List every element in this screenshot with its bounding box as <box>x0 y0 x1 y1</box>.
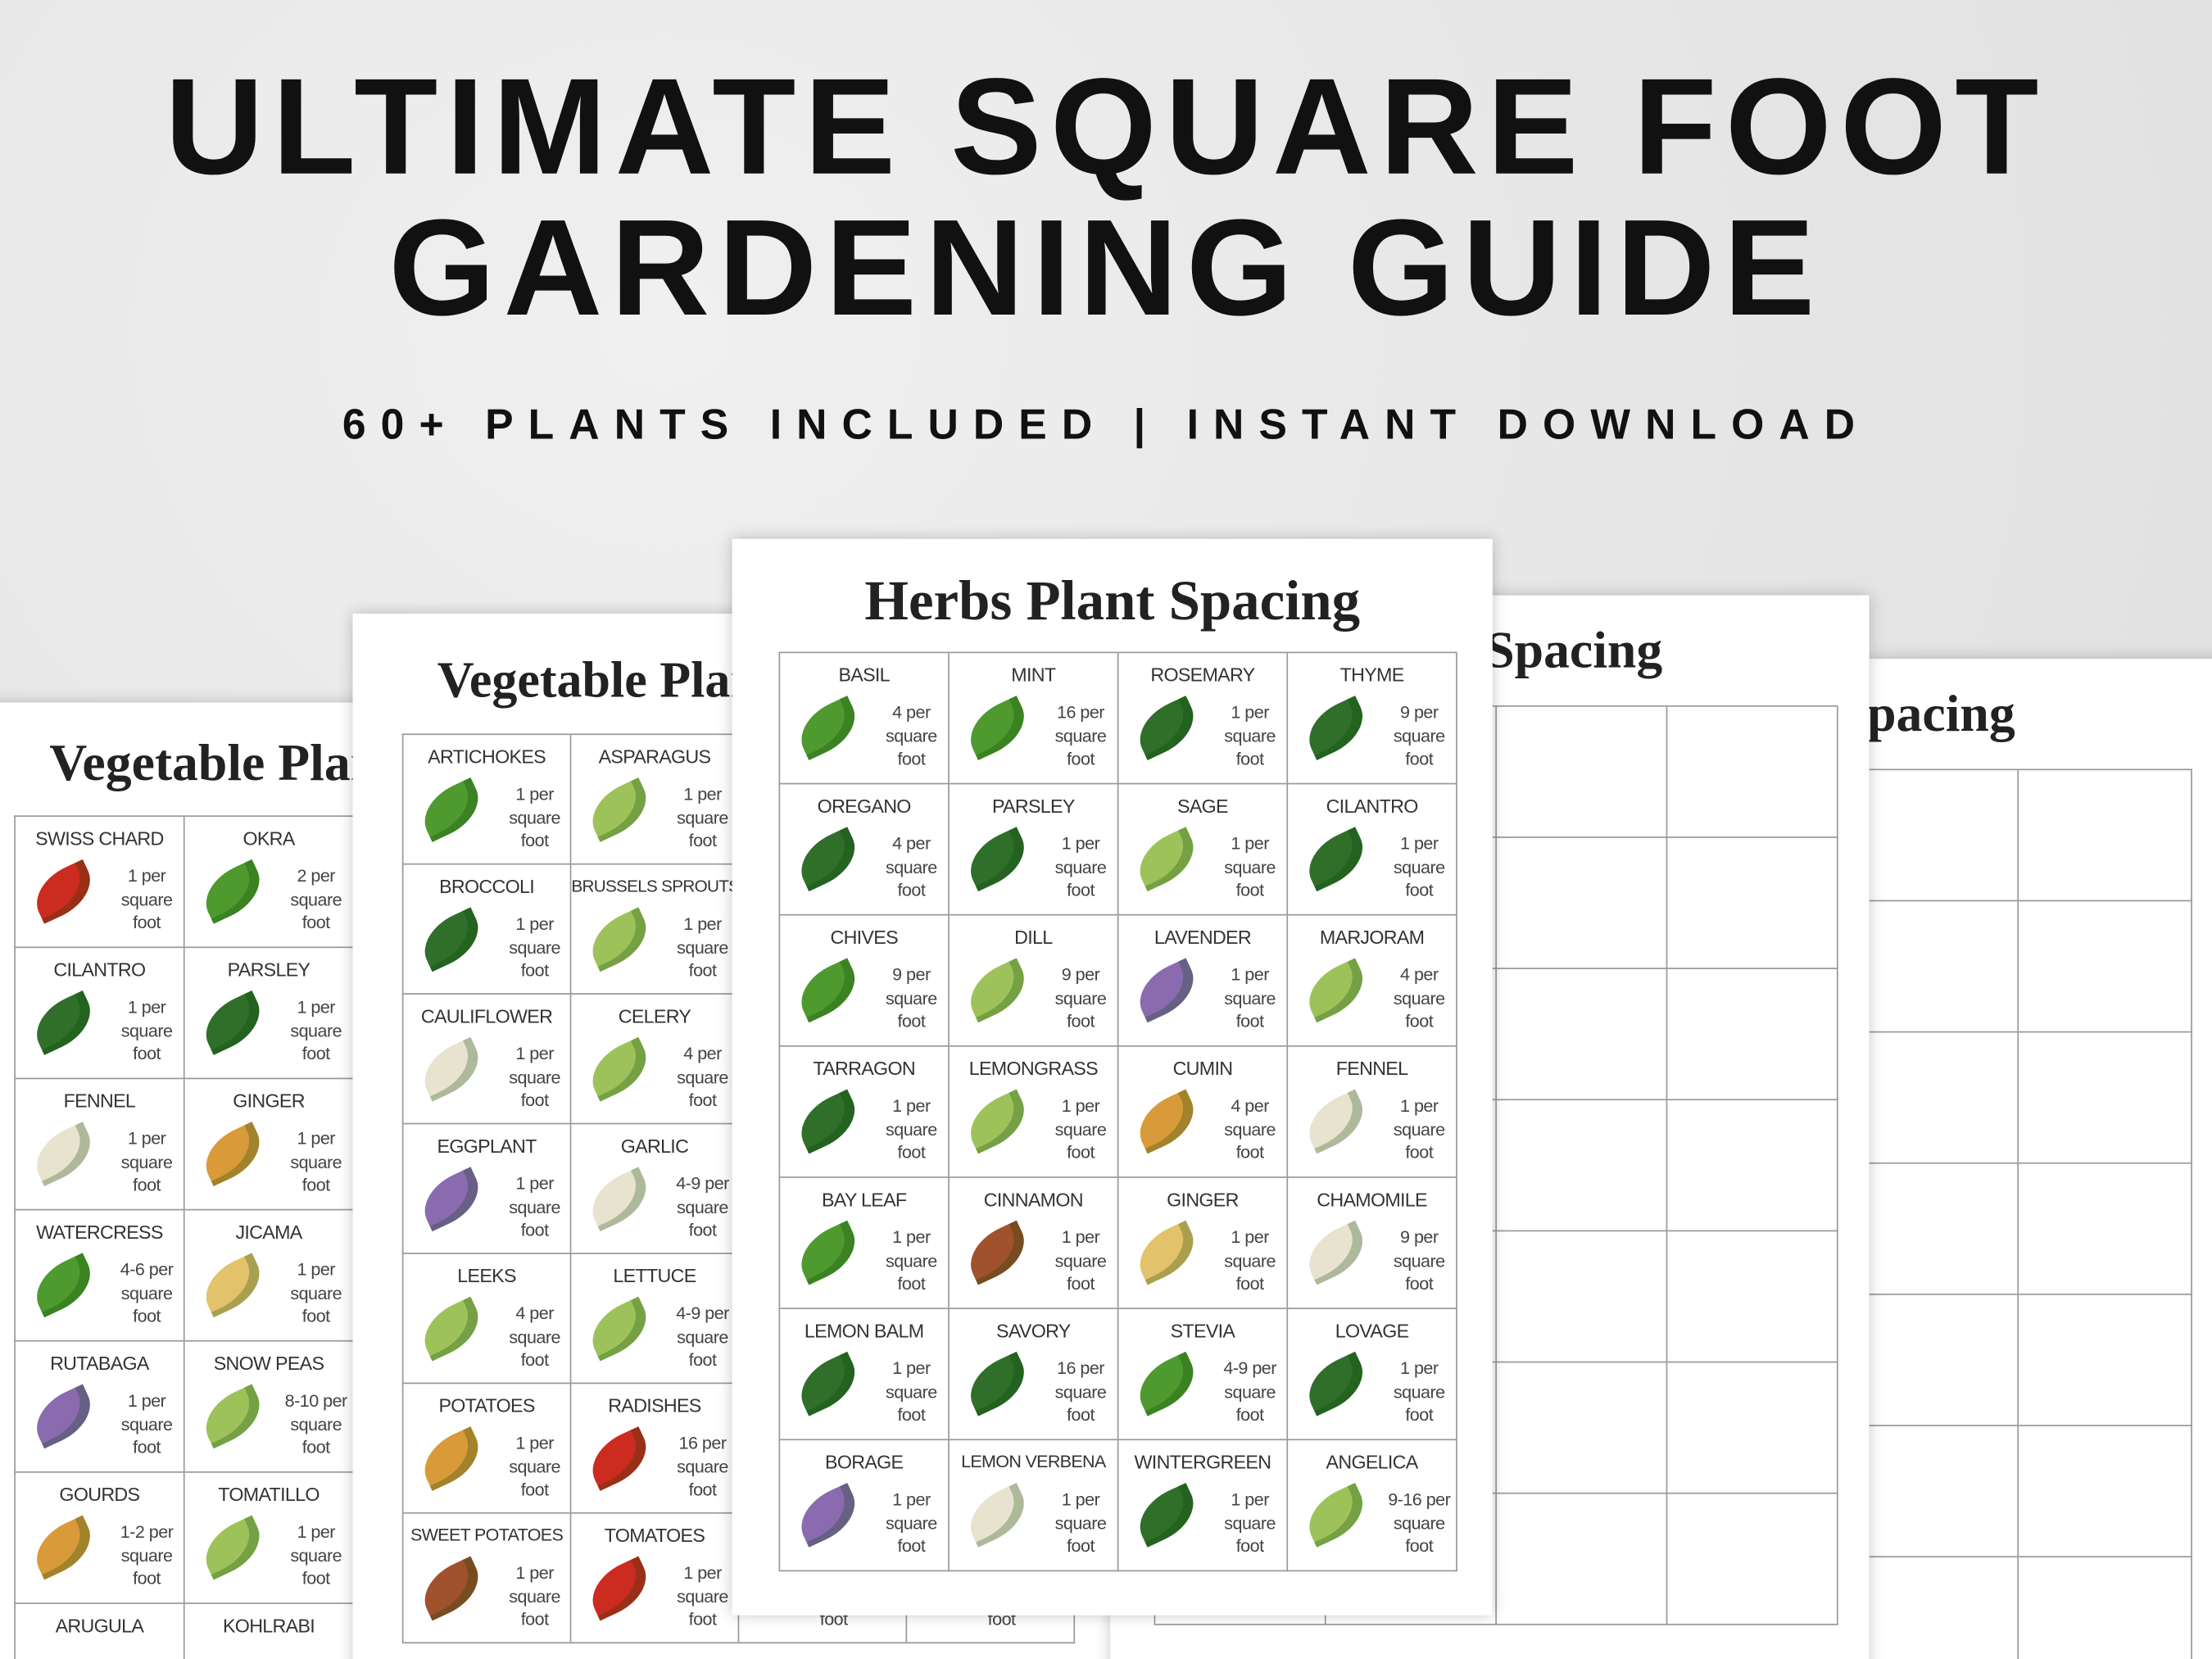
herbs grid: CUMIN <box>1173 1058 1232 1079</box>
herbs grid: 16 per square foot <box>1055 703 1106 768</box>
grid: OKRA <box>243 828 295 850</box>
grid: 1 per square foot <box>290 1260 342 1326</box>
herbs grid: LOVAGE <box>1335 1321 1408 1342</box>
page title: Herbs Plant Spacing <box>864 569 1360 632</box>
grid: JICAMA <box>235 1222 302 1243</box>
grid: RUTABAGA <box>50 1353 149 1374</box>
herbs grid: 1 per square foot <box>1224 834 1276 900</box>
grid: LEEKS <box>457 1266 516 1286</box>
title: GARDENING GUIDE <box>388 190 1824 344</box>
herbs grid: 1 per square foot <box>886 1227 937 1294</box>
grid: 1 per square foot <box>509 914 560 981</box>
herbs grid: 1 per square foot <box>1394 1096 1445 1163</box>
herbs grid: OREGANO <box>818 796 911 817</box>
grid: 16 per square foot <box>677 1433 728 1499</box>
grid: LETTUCE <box>613 1266 696 1286</box>
herbs grid: MARJORAM <box>1320 927 1424 948</box>
grid: BRUSSELS SPROUTS <box>571 876 739 895</box>
grid: 1 per square foot <box>290 1522 342 1589</box>
herbs grid: SAVORY <box>996 1321 1071 1342</box>
herbs grid: 1 per square foot <box>1224 965 1276 1031</box>
herbs grid: 1 per square foot <box>886 1358 937 1425</box>
page title: Spacing <box>1485 622 1662 680</box>
page title: Vegetable Plant Spacing <box>437 652 960 708</box>
herbs grid: LEMON VERBENA <box>961 1452 1106 1471</box>
herbs grid: 9 per square foot <box>1394 703 1445 768</box>
herbs grid: BORAGE <box>825 1452 903 1473</box>
herbs grid: LAVENDER <box>1154 927 1251 948</box>
herbs grid: ANGELICA <box>1326 1452 1418 1473</box>
herbs grid: BAY LEAF <box>822 1190 906 1210</box>
page: blank spacing (far right) <box>1870 659 2212 1659</box>
herbs grid: 16 per square foot <box>1055 1358 1106 1425</box>
herbs grid: 4 per square foot <box>1224 1096 1276 1163</box>
grid: 1 per square foot <box>677 784 728 850</box>
herbs grid: MINT <box>1011 664 1055 686</box>
grid: 1 per square foot <box>121 997 172 1063</box>
herbs grid: 1 per square foot <box>1055 1227 1106 1294</box>
grid: 1 per square foot <box>121 1391 172 1457</box>
herbs grid: 9 per square foot <box>1394 1227 1445 1294</box>
herbs grid: 4 per square foot <box>886 834 937 900</box>
blank grid <box>1154 705 1838 1625</box>
herbs grid: LEMON BALM <box>805 1321 923 1342</box>
title: ULTIMATE SQUARE FOOT <box>165 49 2047 203</box>
herbs grid: CHAMOMILE <box>1317 1190 1427 1210</box>
grid: 4-9 per square foot <box>676 1174 729 1240</box>
herbs grid: 1 per square foot <box>1224 703 1276 768</box>
grid: ARUGULA <box>56 1616 143 1636</box>
herbs grid: 9-16 per square foot <box>1388 1489 1450 1556</box>
subtitle: 60+ PLANTS INCLUDED | INSTANT DOWNLOAD <box>342 402 1870 449</box>
page: herbs plant spacing (front) <box>732 539 1493 1616</box>
herbs grid: 4 per square foot <box>886 703 937 768</box>
herbs grid: 4-9 per square foot <box>1223 1358 1276 1425</box>
page title: Spacing <box>1838 686 2015 743</box>
title <box>165 49 2047 344</box>
herbs grid: LEMONGRASS <box>969 1058 1098 1079</box>
grid: FENNEL <box>64 1090 135 1112</box>
grid: 1 per square foot <box>509 1044 560 1110</box>
grid: KOHLRABI <box>223 1616 315 1636</box>
grid: SWEET POTATOES <box>410 1525 563 1545</box>
herbs grid: BASIL <box>838 664 890 686</box>
page: vegetable spacing (middle) <box>352 614 1114 1659</box>
herbs grid: 9 per square foot <box>1055 965 1106 1031</box>
herbs grid: FENNEL <box>1336 1058 1407 1079</box>
grid: TOMATILLO <box>218 1484 320 1505</box>
herbs grid: TARRAGON <box>813 1058 915 1079</box>
herbs grid: DILL <box>1014 927 1052 948</box>
grid: 8-10 per square foot <box>285 1391 347 1457</box>
grid: EGGPLANT <box>437 1135 537 1157</box>
grid: 1 per square foot <box>509 1563 560 1630</box>
herbs grid: CILANTRO <box>1326 796 1418 817</box>
grid: 1 per square foot <box>509 784 560 850</box>
herbs grid: PARSLEY <box>992 796 1075 817</box>
grid: BROCCOLI <box>439 876 534 897</box>
grid: WATERCRESS <box>36 1222 163 1243</box>
grid: ASPARAGUS <box>599 746 710 768</box>
grid: 4 per square foot <box>509 1303 560 1370</box>
grid: PARSLEY <box>228 959 310 981</box>
grid: CILANTRO <box>53 959 145 981</box>
grid: 1 per square foot <box>976 1563 1027 1630</box>
grid <box>14 815 692 1659</box>
herbs grid: THYME <box>1340 664 1404 686</box>
herbs grid: 1 per square foot <box>1394 834 1445 900</box>
grid: 1 per square foot <box>677 914 728 981</box>
herbs grid: ROSEMARY <box>1150 664 1255 686</box>
grid: ARTICHOKES <box>428 746 546 768</box>
grid: 4-6 per square foot <box>120 1260 173 1326</box>
grid: 4-9 per square foot <box>676 1303 729 1370</box>
herbs grid: 1 per square foot <box>1394 1358 1445 1425</box>
herbs grid: SAGE <box>1177 796 1228 817</box>
herbs grid: GINGER <box>1167 1190 1239 1210</box>
grid: TOMATOES <box>605 1525 705 1546</box>
grid: 2 per square foot <box>290 866 342 932</box>
grid: 1 per square foot <box>290 1129 342 1194</box>
grid: 1 per square foot <box>121 866 172 932</box>
herbs grid: CINNAMON <box>984 1190 1083 1210</box>
grid: 1 per square foot <box>808 1563 859 1630</box>
grid: CELERY <box>619 1006 691 1027</box>
herbs grid: 4 per square foot <box>1394 965 1445 1031</box>
herbs grid: 1 per square foot <box>886 1489 937 1556</box>
grid: GINGER <box>233 1090 305 1112</box>
grid: 1-2 per square foot <box>120 1522 173 1589</box>
page title: Vegetable Plant Spacing <box>49 735 587 793</box>
herbs grid <box>779 652 1457 1571</box>
page: blank spacing (right) <box>1110 596 1870 1659</box>
herbs grid: 1 per square foot <box>1224 1489 1276 1556</box>
herbs grid: 1 per square foot <box>886 1096 937 1163</box>
grid: 1 per square foot <box>509 1433 560 1499</box>
herbs grid: STEVIA <box>1171 1321 1235 1342</box>
grid: CAULIFLOWER <box>421 1006 552 1027</box>
blank grid <box>1844 768 2192 1659</box>
grid: GARLIC <box>621 1135 688 1157</box>
page: vegetable spacing (back left) <box>0 703 762 1659</box>
herbs grid: 1 per square foot <box>1055 1489 1106 1556</box>
grid: 1 per square foot <box>290 997 342 1063</box>
grid: 1 per square foot <box>121 1129 172 1194</box>
herbs grid: CHIVES <box>830 927 898 948</box>
grid: 1 per square foot <box>677 1563 728 1630</box>
herbs grid: 1 per square foot <box>1055 1096 1106 1163</box>
grid: 4 per square foot <box>677 1044 728 1110</box>
grid: SNOW PEAS <box>214 1353 324 1374</box>
herbs grid: 1 per square foot <box>1055 834 1106 900</box>
grid: POTATOES <box>438 1395 535 1416</box>
grid: SWISS CHARD <box>35 828 164 850</box>
grid <box>402 733 1075 1643</box>
grid: 1 per square foot <box>509 1174 560 1240</box>
herbs grid: 1 per square foot <box>1224 1227 1276 1294</box>
grid: GOURDS <box>59 1484 139 1505</box>
grid: RADISHES <box>608 1395 701 1416</box>
herbs grid: 9 per square foot <box>886 965 937 1031</box>
herbs grid: WINTERGREEN <box>1135 1452 1271 1473</box>
